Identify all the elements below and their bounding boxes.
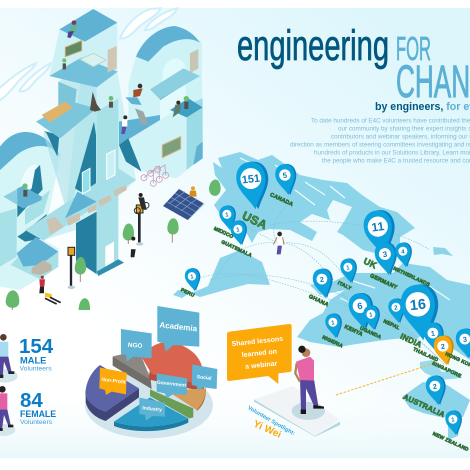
male volunteers stat: [0, 334, 54, 383]
letter E left wall: [0, 208, 17, 267]
sofa: [32, 260, 52, 275]
pin: 1: [184, 267, 202, 292]
person with forklift: [39, 276, 61, 304]
tree: [209, 180, 221, 196]
pin: orange 2: [433, 334, 456, 367]
pin: 3: [455, 327, 470, 360]
label: Ghana: GHANA: [308, 294, 329, 308]
label: Kenya: KENYA: [343, 324, 364, 338]
letter E right glass band: [25, 190, 50, 225]
slice: government green: [150, 389, 193, 418]
pin: 1: [218, 204, 238, 231]
3D letters E4C building: [0, 9, 221, 310]
volunteer Yi Wei figure: [295, 346, 324, 414]
wall door right: [190, 49, 198, 73]
pin: Australia 2: [425, 374, 448, 407]
letter E dark stem lower: [17, 214, 47, 242]
spotlight platform: [254, 386, 340, 437]
female label: FEMALE: [20, 409, 56, 419]
letter 4 dark column: [76, 212, 97, 274]
street lamp front: [68, 247, 75, 289]
male count: 154: [19, 335, 54, 358]
column upper dark blue: [58, 82, 77, 112]
long lower floor: [25, 168, 136, 241]
floor foot: [97, 259, 124, 276]
pin: 11: [362, 208, 399, 258]
upper floor: [49, 57, 118, 87]
pin: 4: [394, 241, 414, 268]
title: engineering: engineering: [237, 22, 389, 70]
window panel: [82, 168, 90, 194]
letter E glass body: [0, 143, 60, 290]
map: south america: [173, 250, 270, 298]
solar panel: [163, 189, 206, 220]
person on C shelf: [173, 101, 181, 117]
bubble: Industry: Industry: [142, 405, 162, 413]
male volunteers word: Volunteers: [20, 366, 52, 372]
intro paragraph: [290, 118, 470, 164]
dotted connection arcs: [195, 200, 445, 365]
bubble: NGO: NGO: [128, 342, 143, 350]
letter C dark stem: [119, 138, 142, 172]
pin: 1: [339, 257, 359, 284]
spotlight floor shadow: [292, 402, 325, 420]
trees: [6, 180, 221, 310]
location pins: [184, 160, 470, 436]
letter 4 light column: [97, 98, 118, 274]
spotlight name: Yi Wei: [251, 419, 283, 441]
chalkboard left: [162, 137, 181, 158]
letter 4 left diagonal: [44, 131, 59, 157]
female volunteers stat: [0, 386, 56, 436]
floor with desk: [36, 102, 97, 138]
letter E lower box glass: [11, 237, 58, 279]
plant shelf dark: [17, 186, 42, 208]
speech bubble: [227, 324, 292, 384]
map: new zealand: [448, 422, 460, 440]
map: africa: [297, 290, 413, 347]
pie shadow: [85, 372, 213, 438]
label: New Zealand: NEW ZEALAND: [431, 431, 470, 453]
letter C right side: [187, 98, 203, 170]
icon: male volunteer: [0, 334, 18, 383]
bicycles: [141, 165, 169, 186]
tree: [6, 290, 19, 308]
pin: 1: [362, 304, 382, 331]
tree: [75, 257, 86, 275]
letter 4 top face: [59, 9, 117, 42]
letter C inner hole: [160, 59, 186, 120]
label: Peru: PERU: [179, 287, 196, 299]
label: Mexico: MEXICO: [213, 226, 234, 240]
volunteer spotlight: [227, 324, 340, 441]
map: australia: [402, 382, 470, 417]
letter C top face: [136, 26, 200, 62]
label: Singapore: SINGAPORE: [431, 361, 463, 380]
letter 4 back column: [43, 67, 97, 217]
wood meeting table: [42, 102, 73, 123]
letter C corner: [193, 142, 203, 165]
tables top floor: [80, 53, 106, 67]
label: Italy: ITALY: [337, 280, 353, 292]
map: europe and asia: [310, 263, 470, 360]
speech bubble: a webinar: [245, 360, 278, 371]
stair dark cone: [90, 92, 101, 112]
person at computer: [133, 84, 143, 97]
map: island off asia: [433, 247, 453, 256]
person on bridge: [121, 115, 127, 134]
white door: [105, 242, 114, 267]
cyclist: [134, 193, 149, 214]
title: for: FOR: [396, 30, 431, 67]
small shelf: [125, 97, 142, 105]
pie chart of volunteer sectors: [85, 306, 217, 438]
plant leaves: [22, 58, 189, 189]
world map: [173, 152, 470, 440]
bubble: Academia: Academia: [159, 320, 198, 333]
clouds: [0, 8, 177, 102]
label: Guatemala: GUATEMALA: [220, 239, 253, 259]
pin: India 16: [399, 283, 442, 342]
label: Canada: CANADA: [269, 192, 294, 208]
bubble: Non-Profit: Non-Profit: [101, 377, 126, 386]
pin: 2: [312, 267, 335, 300]
male label: MALE: [20, 356, 46, 366]
label: USA: USA: [240, 209, 270, 232]
female count: 84: [20, 389, 43, 412]
letter C dark band: [160, 70, 184, 100]
letter E plant shelf: [3, 186, 42, 208]
tree: [123, 223, 134, 240]
person walking: [131, 237, 137, 257]
tree: [167, 218, 179, 235]
label: Netherlands: NETHERLANDS: [392, 266, 431, 288]
spotlight caption: Volunteer Spotlight:: [246, 405, 296, 437]
letter E top face: [0, 132, 61, 170]
slice: industry teal: [114, 397, 188, 431]
tree trunks: [12, 233, 172, 310]
label: Uganda: UGANDA: [359, 325, 382, 341]
label: Nepal: NEPAL: [382, 319, 401, 332]
label: India: INDIA: [399, 332, 423, 350]
worker on solar panel: [189, 186, 197, 197]
title: [237, 22, 470, 107]
person top sitting: [67, 20, 77, 38]
stairs: [135, 108, 148, 125]
bubble: Social: Social: [196, 374, 212, 382]
label: Thailand: THAILAND: [412, 347, 439, 364]
letter E pale hole: [18, 165, 42, 207]
dotted line to spotlight: [336, 363, 435, 395]
map: indonesia islands: [420, 360, 462, 380]
slice: academia red: [142, 342, 205, 392]
letter E lower box top: [17, 237, 58, 267]
pin: 2: [387, 297, 407, 324]
bubble: Government: Government: [157, 380, 187, 389]
letter 4 glass body: [43, 23, 136, 275]
label: Germany: GERMANY: [369, 273, 398, 291]
pin: 1: [423, 321, 446, 354]
letter C shelf: [150, 68, 200, 99]
label: Nigeria: NIGERIA: [321, 335, 344, 350]
letter E dark stem upper: [17, 165, 43, 217]
pin: New Zealand 1: [444, 409, 464, 436]
icon: female volunteer: [0, 386, 15, 436]
tree: [79, 298, 90, 310]
window panel 2: [107, 150, 115, 179]
pin: 1: [229, 219, 249, 246]
chalkboard top: [65, 41, 82, 57]
pin: 1: [324, 312, 344, 339]
slice: social orange: [167, 387, 206, 411]
speech bubble: learned on: [241, 348, 277, 359]
label: Australia: AUSTRALIA: [402, 392, 447, 420]
plant pots: [23, 63, 188, 197]
speech bubble: Shared lessons: [231, 336, 284, 348]
letter C plant shelf: [170, 98, 203, 117]
pin: 3: [373, 241, 400, 277]
letter 4 dark diagonal: [75, 122, 96, 201]
map: north america and arctic: [213, 152, 415, 257]
wall door: [108, 46, 117, 73]
pin: Canada 5: [274, 163, 299, 197]
female volunteers word: Volunteers: [20, 419, 53, 426]
slice: NGO gray: [113, 354, 152, 389]
floor base: [65, 192, 97, 218]
street lamp right: [136, 205, 143, 246]
pin: 6: [347, 292, 376, 331]
label: UK: UK: [362, 256, 379, 271]
connecting bridge: [119, 115, 160, 145]
letter C glass body: [128, 27, 203, 178]
slice: non-profit: [85, 365, 139, 421]
walking volunteer on map: [273, 232, 284, 254]
pin: USA 151: [235, 160, 271, 211]
map white gaps: [240, 158, 450, 305]
country labels: [179, 192, 470, 453]
lower floor desks: [47, 185, 127, 235]
